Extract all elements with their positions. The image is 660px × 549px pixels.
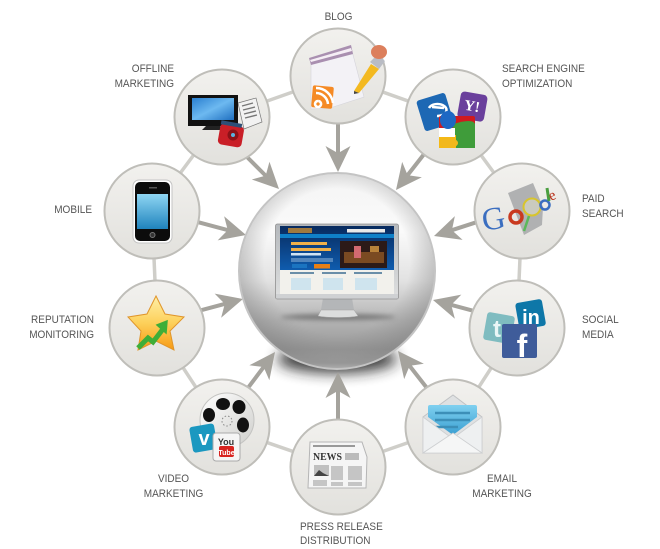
label: social media xyxy=(582,314,619,341)
node: video marketing xyxy=(174,380,270,474)
label: reputation monitoring: MONITORING xyxy=(29,329,94,341)
icon: Bing, Yahoo and Google tiles: Y! xyxy=(463,98,481,116)
label: blog: BLOG xyxy=(325,11,352,23)
label: offline marketing xyxy=(115,63,174,90)
icon: Twitter, LinkedIn and Facebook tiles: f xyxy=(517,328,528,364)
label: social media: MEDIA xyxy=(582,329,614,341)
label: press release distribution xyxy=(300,521,383,547)
label: search engine optimization xyxy=(502,63,585,90)
icon: monitor with website xyxy=(276,224,398,318)
node: press release distribution xyxy=(290,420,386,514)
label: video marketing: VIDEO xyxy=(158,473,189,485)
icon: Twitter, LinkedIn and Facebook tiles xyxy=(483,299,546,364)
label: video marketing xyxy=(144,473,203,500)
central sphere xyxy=(239,173,435,369)
label: email marketing: EMAIL xyxy=(487,473,517,485)
label: reputation monitoring xyxy=(29,314,94,341)
icon: Google logo with magnifier: e xyxy=(546,187,559,205)
icon: notepad, RSS and pencil xyxy=(309,45,387,109)
label: search engine optimization: OPTIMIZATION xyxy=(502,78,572,90)
node: social media xyxy=(470,280,564,376)
label: paid search: SEARCH xyxy=(582,208,624,220)
icon: Twitter, LinkedIn and Facebook tiles: in xyxy=(522,307,540,329)
icon: Twitter, LinkedIn and Facebook tiles: t xyxy=(493,316,501,343)
icon: film reel, Vimeo and YouTube: v xyxy=(198,428,210,450)
label: offline marketing: MARKETING xyxy=(115,78,174,90)
label: mobile: MOBILE xyxy=(54,204,92,216)
label: social media: SOCIAL xyxy=(582,314,619,326)
icon: film reel, Vimeo and YouTube: Tube xyxy=(218,450,235,457)
node: email marketing xyxy=(406,380,500,474)
icon: film reel, Vimeo and YouTube: You xyxy=(218,437,234,447)
label: email marketing: MARKETING xyxy=(472,488,532,500)
icon: Google logo with magnifier: G xyxy=(479,198,508,238)
monitor shadow xyxy=(281,314,395,320)
node: offline marketing xyxy=(174,70,270,164)
label: offline marketing: OFFLINE xyxy=(132,63,174,75)
label: paid search xyxy=(582,193,624,220)
icon: star with rising arrow xyxy=(128,296,184,350)
icon: film reel, Vimeo and YouTube xyxy=(189,393,254,461)
icon: smartphone xyxy=(133,180,172,243)
node: blog xyxy=(290,28,387,124)
icon: envelope with letter xyxy=(423,395,482,453)
label: paid search: PAID xyxy=(582,193,605,205)
ring connector xyxy=(152,76,522,467)
sphere shadow xyxy=(277,345,397,373)
node: search engine optimization xyxy=(406,70,500,164)
label: search engine optimization: SEARCH ENGINE xyxy=(502,63,585,75)
arrows xyxy=(191,122,485,422)
label: press release distribution: PRESS RELEASE xyxy=(300,521,383,533)
icon: Google logo with magnifier xyxy=(479,183,559,238)
label: reputation monitoring: REPUTATION xyxy=(31,314,94,326)
label: press release distribution: DISTRIBUTION xyxy=(300,535,371,547)
icon: newspaper: NEWS xyxy=(313,451,342,463)
node: mobile xyxy=(104,164,200,258)
label: email marketing xyxy=(472,473,532,500)
node: paid search xyxy=(474,164,570,258)
label: video marketing: MARKETING xyxy=(144,488,203,500)
icon: TV, newspaper and radio xyxy=(188,95,262,148)
node: reputation monitoring xyxy=(110,280,204,376)
